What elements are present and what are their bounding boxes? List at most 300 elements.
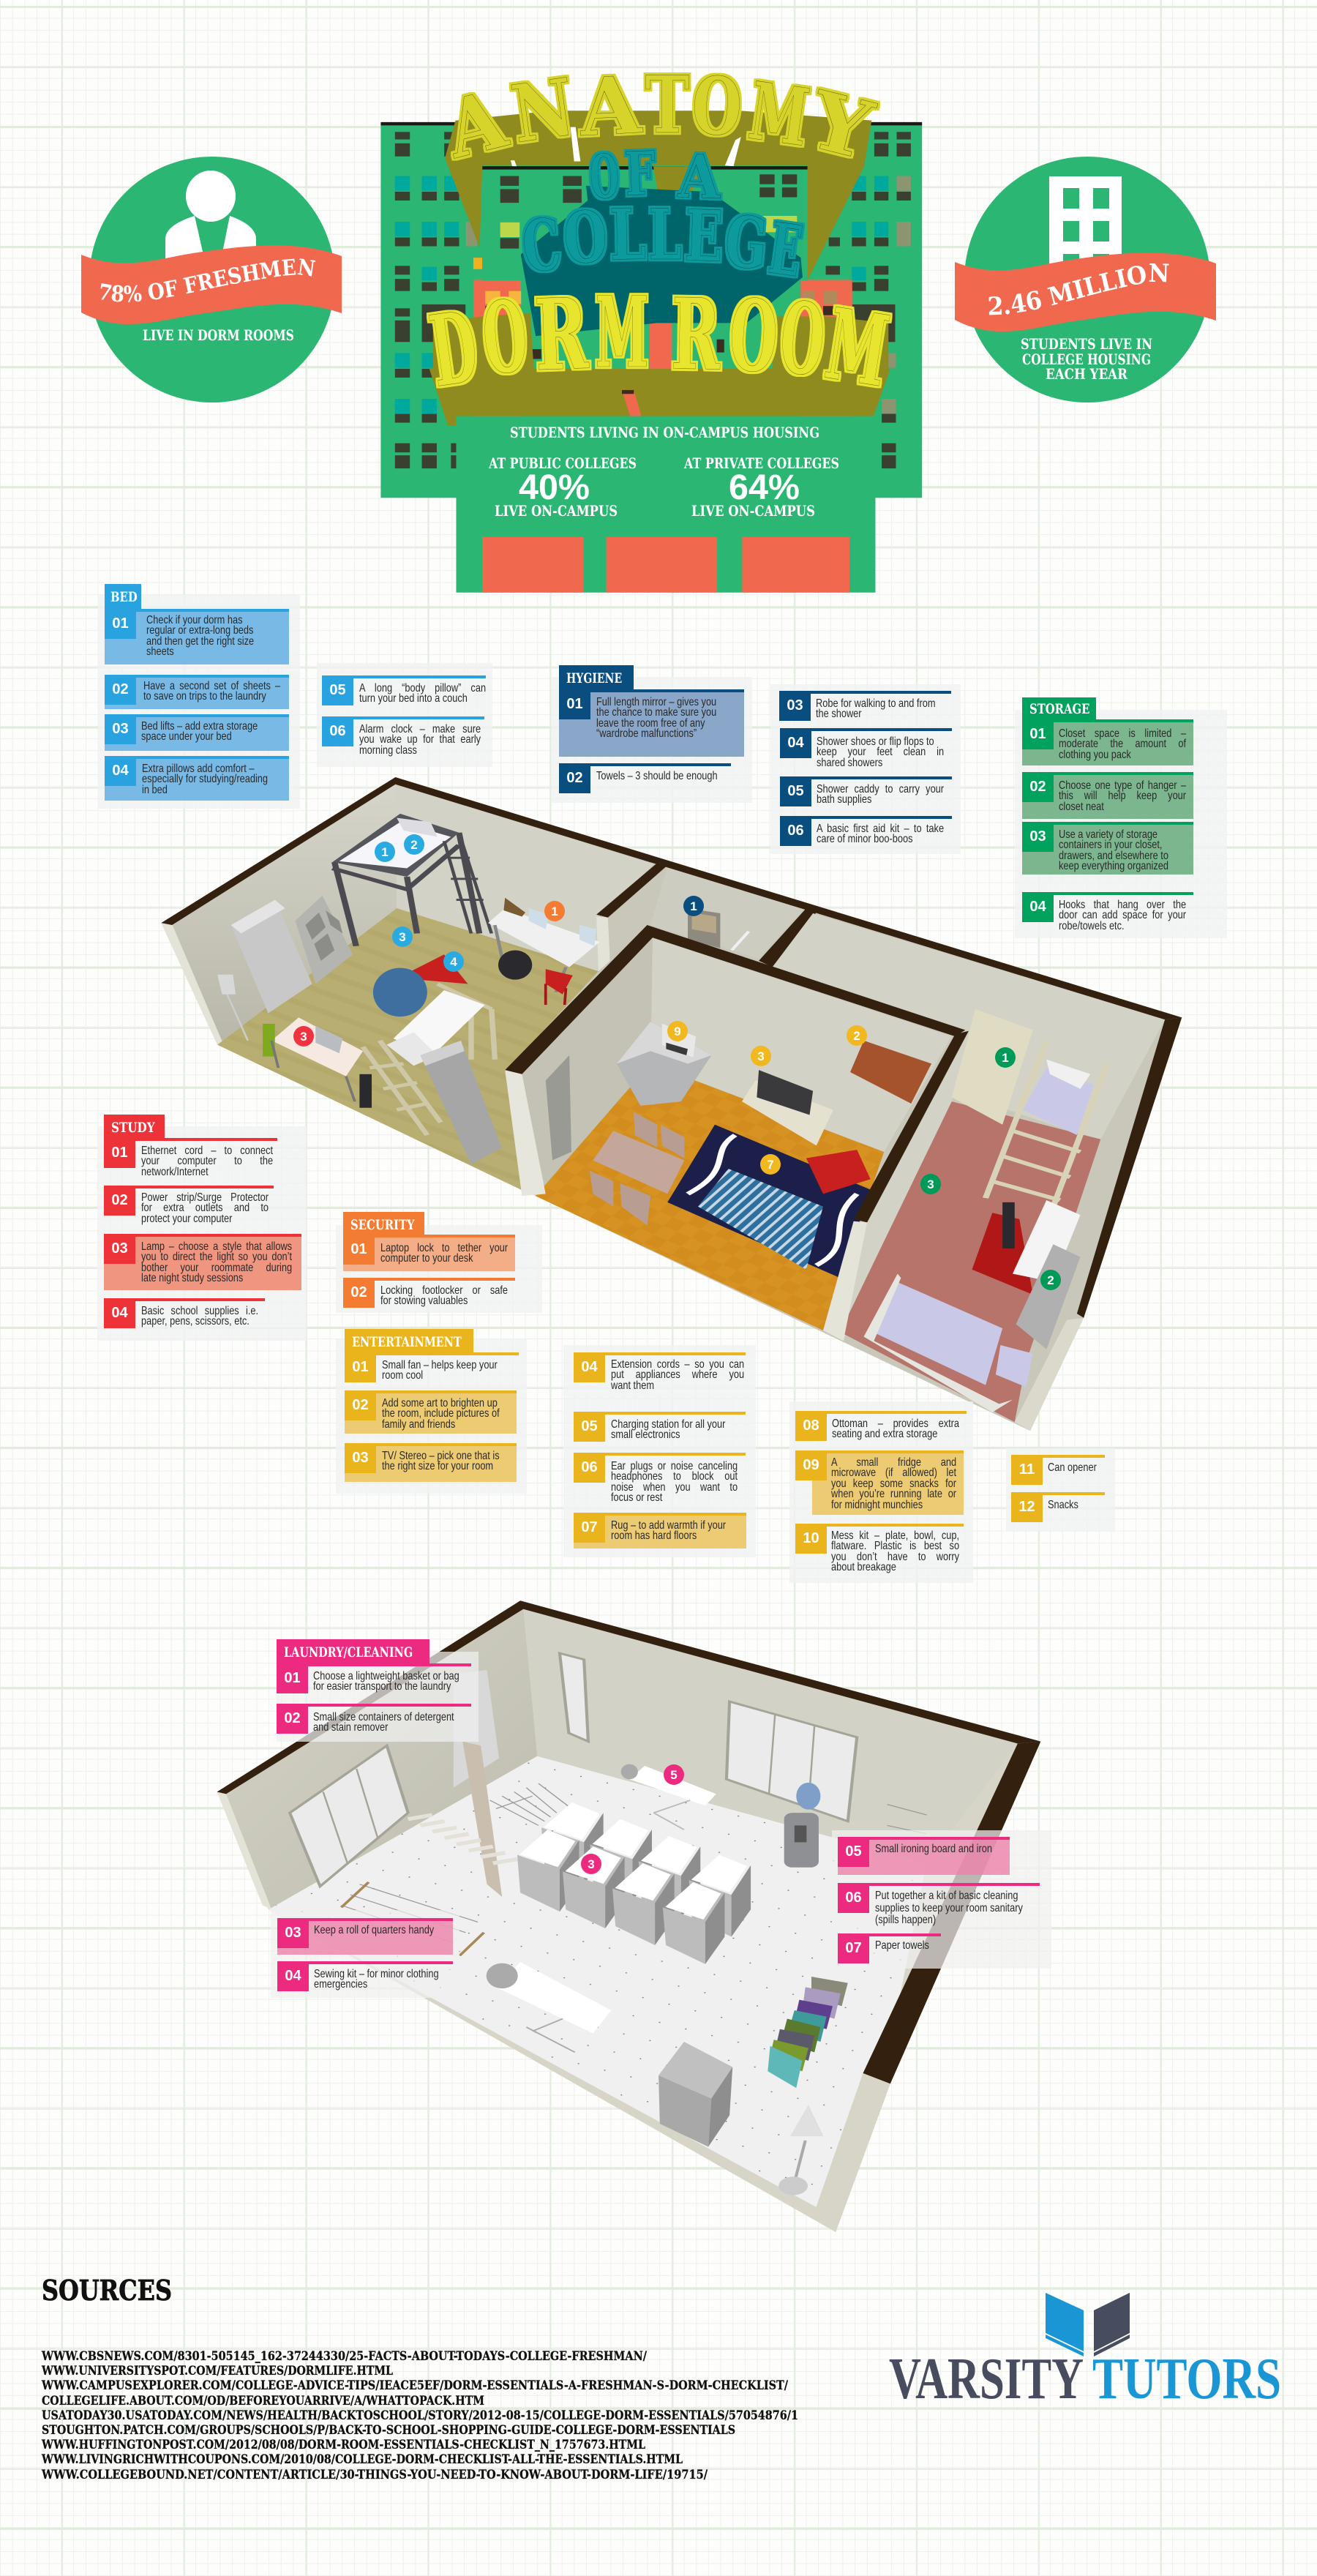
item 02 <box>104 1186 274 1226</box>
item 03: late night study sessions <box>141 1272 243 1284</box>
sources list: WWW.CBSNEWS.COM/8301-505145_162-37244330/25-FACTS-ABOUT-TODAYS-COLLEGE-FRESHMAN/ <box>41 2349 648 2364</box>
painting <box>850 1041 931 1104</box>
item 04: 04 <box>111 1305 128 1321</box>
item 10: you don’t have to worry <box>831 1551 959 1563</box>
item 02 <box>105 675 289 709</box>
item 02 <box>345 1390 517 1434</box>
item 07: Rug – to add warmth if your <box>611 1519 726 1532</box>
item 02: closet neat <box>1059 801 1104 813</box>
item 08: Ottoman – provides extra <box>832 1418 959 1430</box>
panel: hygiene <box>552 665 752 803</box>
badge: hygiene 1 <box>683 896 704 916</box>
sources and logo <box>0 2261 1317 2496</box>
building <box>380 111 922 593</box>
sources list: WWW.LIVINGRICHWITHCOUPONS.COM/2010/08/COLLEGE-DORM-CHECKLIST-ALL-THE-ESSENTIALS.HTML <box>41 2452 683 2467</box>
ribbon text: 78% OF FRESHMEN <box>101 258 316 302</box>
tv stand <box>742 1070 833 1145</box>
overhead rack <box>408 1815 517 1863</box>
icon: student <box>165 171 256 278</box>
room: bedroom two <box>773 913 1165 1431</box>
sources list: WWW.CAMPUSEXPLORER.COM/COLLEGE-ADVICE-TIPS/IEACE5EF/DORM-ESSENTIALS-A-FRESHMAN-S-DORM-CHECKLIST/ <box>41 2378 789 2393</box>
badge: entertainment 7 <box>760 1154 781 1175</box>
item 01: 01 <box>1029 726 1046 742</box>
panel: security <box>336 1212 542 1313</box>
item 05: small electronics <box>611 1429 680 1441</box>
item 01 <box>277 1663 471 1693</box>
item 03: 03 <box>1029 828 1046 845</box>
title: anatomy: N <box>506 60 580 161</box>
item 01: Small fan – helps keep your <box>382 1359 498 1371</box>
badge: entertainment 2 <box>847 1025 867 1046</box>
badge: laundry 5: 5 <box>670 1768 678 1782</box>
title: of a: O <box>588 141 621 213</box>
header illustration <box>81 58 1216 593</box>
item 04: Hooks that hang over the <box>1059 899 1186 911</box>
item 02: to save on trips to the laundry <box>143 690 266 703</box>
item 01: 01 <box>352 1359 369 1375</box>
item 04: especially for studying/reading <box>142 773 268 785</box>
item 02 <box>559 763 731 793</box>
item 04: Basic school supplies i.e. <box>141 1305 258 1317</box>
item 03: 03 <box>112 721 129 737</box>
room: living room <box>505 937 952 1330</box>
item 06 <box>574 1453 746 1504</box>
title: college: E <box>765 206 807 293</box>
badge: entertainment 9 <box>667 1021 688 1041</box>
panel: bed continued <box>317 663 492 767</box>
item 07: Paper towels <box>875 1939 929 1952</box>
item 06: Ear plugs or noise canceling <box>611 1460 738 1472</box>
item 09: 09 <box>803 1457 819 1473</box>
heading: bed <box>105 584 141 610</box>
item 05 <box>574 1412 746 1442</box>
item 01: for easier transport to the laundry <box>313 1680 451 1693</box>
item 04 <box>574 1352 746 1393</box>
tall locker <box>421 1041 502 1164</box>
panel: entertainment four <box>1006 1448 1115 1532</box>
badge: bed 2 <box>404 834 424 855</box>
room: hallway <box>650 866 804 959</box>
panel: laundry right <box>832 1830 1051 1969</box>
item 02: Have a second set of sheets – <box>143 680 280 692</box>
item 03: Bed lifts – add extra storage <box>141 720 258 733</box>
title: college: L <box>609 192 647 276</box>
title: college <box>519 192 807 293</box>
item 03: 03 <box>787 697 803 714</box>
housing stats: 64% <box>729 468 800 507</box>
heading: security <box>343 1212 424 1235</box>
item 10 <box>795 1524 964 1575</box>
heading: entertainment <box>345 1329 473 1353</box>
item 12 <box>1011 1492 1105 1522</box>
item 01: “wardrobe malfunctions” <box>596 727 697 740</box>
item 06: headphones to block out <box>611 1470 738 1483</box>
item 08: seating and extra storage <box>832 1428 937 1440</box>
item 06: noise when you want to <box>611 1481 738 1494</box>
housing stats: AT PRIVATE COLLEGES <box>683 454 839 472</box>
ribbon text: 2.46 MILLION <box>989 263 1169 315</box>
panel: bed <box>98 584 300 809</box>
item 01: regular or extra-long beds <box>146 624 253 637</box>
item 05 <box>838 1837 1010 1875</box>
item 05: turn your bed into a couch <box>359 692 468 705</box>
item 02: family and friends <box>382 1418 455 1431</box>
badge: storage 3 <box>920 1174 941 1194</box>
title: college: C <box>519 203 565 289</box>
item 03: bother your roommate during <box>141 1262 292 1274</box>
item 11: 11 <box>1019 1461 1035 1478</box>
room: bedroom one <box>161 785 654 1192</box>
title extrusion: dorm room <box>429 369 890 426</box>
item 10: about breakage <box>831 1561 896 1573</box>
item 02: 02 <box>1029 779 1046 795</box>
item 02: Towels – 3 should be enough <box>596 770 718 782</box>
item 03 <box>345 1443 517 1482</box>
sources list: STOUGHTON.PATCH.COM/GROUPS/SCHOOLS/P/BACK-TO-SCHOOL-SHOPPING-GUIDE-COLLEGE-DORM-ESSENTIALS <box>42 2423 735 2438</box>
item 04: Sewing kit – for minor clothing <box>314 1968 439 1980</box>
item 05 <box>322 675 486 705</box>
item 07 <box>574 1513 746 1549</box>
item 01: Choose a lightweight basket or bag <box>313 1670 459 1682</box>
item 01 <box>559 689 744 757</box>
item 06: 06 <box>845 1890 862 1906</box>
badge: storage 1 <box>995 1047 1016 1068</box>
item 10: 10 <box>803 1530 819 1546</box>
sources heading: SOURCES <box>42 2274 172 2307</box>
red blocks <box>473 280 521 417</box>
title: dorm room: R <box>533 276 590 393</box>
kitchen unit <box>617 1022 711 1106</box>
item 05: 05 <box>329 682 346 698</box>
title: dorm room: D <box>424 289 484 410</box>
divider walls <box>596 863 817 967</box>
item 05: bath supplies <box>817 793 871 806</box>
badge: laundry 5 <box>664 1764 684 1785</box>
item 06: care of minor boo-boos <box>817 833 912 845</box>
panel: storage <box>1015 697 1227 938</box>
item 04: shared showers <box>817 757 882 769</box>
item 05: Charging station for all your <box>611 1418 725 1431</box>
title: anatomy: A <box>436 72 516 177</box>
item 05: 05 <box>787 783 804 799</box>
badge: bed 1 <box>375 842 395 862</box>
panel: entertainment continued <box>563 1345 756 1557</box>
badge: bed 4: 4 <box>450 955 457 969</box>
title: anatomy: M <box>743 64 814 165</box>
title: anatomy: A <box>577 59 645 154</box>
item 06: 06 <box>581 1459 598 1475</box>
sources list: USATODAY30.USATODAY.COM/NEWS/HEALTH/BACKTOSCHOOL/STORY/2012-08-15/COLLEGE-DORM-ESSENTIALS/57054876/1 <box>42 2408 798 2423</box>
item 07: room has hard floors <box>611 1530 697 1542</box>
wall caps <box>217 1600 1040 2083</box>
item 01 <box>343 1235 515 1271</box>
title extrusion: anatomy <box>445 111 871 280</box>
title: college: O <box>561 195 610 280</box>
red mat and desk <box>972 1200 1080 1295</box>
stand-alone washer <box>658 2042 732 2147</box>
heading: security: SECURITY <box>350 1217 415 1233</box>
item 04: robe/towels etc. <box>1059 920 1125 932</box>
title: college: L <box>648 194 682 276</box>
item 01: Laptop lock to tether your <box>380 1242 508 1254</box>
windows <box>395 132 911 468</box>
item 02 <box>343 1278 515 1308</box>
washers <box>517 1802 751 1964</box>
title: dorm room: M <box>596 274 648 390</box>
icon: building <box>1049 176 1122 272</box>
loft bed <box>332 814 492 946</box>
title: anatomy: Y <box>800 73 882 179</box>
item 03 <box>105 714 289 751</box>
item 05: Small ironing board and iron <box>875 1843 992 1855</box>
logo: varsity tutors <box>889 2293 1281 2411</box>
item 04: 04 <box>112 763 129 779</box>
item 09: A small fridge and <box>831 1456 956 1469</box>
item 02 <box>1022 772 1193 819</box>
item 02: Power strip/Surge Protector <box>141 1191 269 1204</box>
item 11 <box>1011 1455 1105 1485</box>
item 12: 12 <box>1018 1499 1035 1515</box>
item 04: door can add space for your <box>1059 909 1186 921</box>
item 06: focus or rest <box>611 1491 662 1504</box>
badge: study 3: 3 <box>300 1030 307 1044</box>
item 10: Mess kit – plate, bowl, cup, <box>831 1530 959 1542</box>
chairs <box>498 950 573 1005</box>
item 01 <box>105 609 289 664</box>
item 08: 08 <box>803 1418 819 1434</box>
water cooler <box>784 1783 820 1868</box>
study desk <box>263 1017 372 1108</box>
beam <box>462 1742 502 1897</box>
heading: entertainment: ENTERTAINMENT <box>352 1334 462 1350</box>
item 04: Extension cords – so you can <box>611 1358 744 1371</box>
walls <box>217 1609 1018 1909</box>
item 04: 04 <box>1029 899 1046 915</box>
item 06: 06 <box>787 823 804 839</box>
badge: security 1: 1 <box>551 905 558 918</box>
item 03: keep everything organized <box>1059 860 1168 872</box>
item 01: moderate the amount of <box>1059 738 1186 750</box>
item 04: 04 <box>581 1359 598 1375</box>
title: of a <box>588 138 723 213</box>
item 01 <box>104 1138 277 1178</box>
title: college: E <box>683 194 724 278</box>
item 02: and stain remover <box>313 1721 388 1734</box>
floor plan: dorm suite <box>161 777 1182 1431</box>
floor <box>269 1756 927 2208</box>
heading: bed: BED <box>110 589 138 605</box>
desk with laptops <box>488 898 600 992</box>
badge: entertainment 2: 2 <box>853 1029 860 1043</box>
title: of a: F <box>623 138 657 209</box>
item 02: Locking footlocker or safe <box>380 1284 508 1297</box>
heading: storage: STORAGE <box>1029 701 1089 717</box>
badge: entertainment 9: 9 <box>674 1025 681 1038</box>
item 01: and then get the right size <box>146 635 254 648</box>
caption: LIVE IN DORM ROOMS <box>143 326 294 344</box>
item 06: supplies to keep your room sanitary <box>875 1901 1023 1914</box>
badge: laundry 3 <box>581 1854 601 1874</box>
closet and shelf <box>231 896 353 1014</box>
item 04: Shower shoes or flip flops to <box>817 735 934 748</box>
item 06: (spills happen) <box>875 1914 936 1926</box>
item 04: keep your feet clean in <box>817 746 944 758</box>
caption <box>1021 335 1152 383</box>
badge: hygiene 1: 1 <box>690 899 697 913</box>
housing stats: LIVE ON-CAMPUS <box>495 502 618 520</box>
housing stats: AT PUBLIC COLLEGES <box>488 454 637 472</box>
badge: entertainment 7: 7 <box>767 1158 774 1172</box>
item 09: when you’re running late or <box>831 1488 956 1500</box>
item 04 <box>780 728 952 769</box>
windows <box>290 1653 857 1887</box>
item 06: A basic first aid kit – to take <box>817 823 944 835</box>
item 02: Small size containers of detergent <box>313 1711 454 1723</box>
item 07: 07 <box>845 1940 862 1956</box>
item 04: 04 <box>787 735 804 751</box>
item 05: Shower caddy to carry your <box>817 783 944 795</box>
item 04 <box>104 1298 265 1328</box>
wardrobe <box>952 1009 1033 1125</box>
item 09 <box>795 1450 964 1515</box>
badge: entertainment 3 <box>751 1046 771 1066</box>
panel: entertainment <box>336 1329 527 1494</box>
item 02: for extra outlets and to <box>141 1202 269 1214</box>
item 01 <box>1022 719 1193 765</box>
shirts <box>768 1977 848 2088</box>
item 03 <box>1022 822 1193 875</box>
housing stats: STUDENTS LIVING IN ON-CAMPUS HOUSING <box>510 424 819 441</box>
item 01: network/Internet <box>141 1166 209 1178</box>
title: anatomy <box>436 58 882 179</box>
lower bed <box>863 1273 1033 1412</box>
item 07: 07 <box>581 1519 598 1535</box>
sources list <box>41 2349 798 2482</box>
title extrusion: college <box>586 186 721 219</box>
item 03: you to direct the light so you don’t <box>141 1251 292 1263</box>
item 01: the chance to make sure you <box>596 706 716 719</box>
ball and red cushion <box>373 954 468 1016</box>
title: dorm room <box>424 274 896 410</box>
badge: bed 1: 1 <box>381 845 389 859</box>
logo: varsity tutors: VARSITY <box>889 2347 1084 2411</box>
title: dorm room: O <box>776 280 829 399</box>
item 02: protect your computer <box>141 1213 232 1225</box>
item 06: 06 <box>329 723 346 739</box>
item 05: A long “body pillow” can <box>359 682 486 694</box>
large board <box>487 1962 611 2052</box>
sources list: WWW.HUFFINGTONPOST.COM/2012/08/08/DORM-ROOM-ESSENTIALS-CHECKLIST_N_1757673.HTML <box>41 2438 645 2452</box>
item 03: Robe for walking to and from <box>816 697 935 710</box>
item 02: for stowing valuables <box>380 1295 468 1307</box>
item 04: Extra pillows add comfort – <box>142 763 255 775</box>
item 04 <box>277 1961 453 1991</box>
caption: COLLEGE HOUSING <box>1022 351 1151 368</box>
heading: storage <box>1022 697 1096 720</box>
item 04: 04 <box>285 1968 301 1984</box>
bunk bed <box>986 1041 1108 1207</box>
doors <box>482 537 583 593</box>
item 03: Lamp – choose a style that allows <box>141 1240 292 1253</box>
ironing boards <box>621 1764 716 1830</box>
sources list: COLLEGELIFE.ABOUT.COM/OD/BEFOREYOUARRIVE/A/WHATTOPACK.HTM <box>42 2394 484 2408</box>
panel: laundry <box>277 1639 479 1742</box>
sources list: WWW.COLLEGEBOUND.NET/CONTENT/ARTICLE/30-THINGS-YOU-NEED-TO-KNOW-ABOUT-DORM-LIFE/19715/ <box>41 2468 708 2482</box>
item 01 <box>345 1352 519 1382</box>
floor lamp <box>778 2105 824 2195</box>
lower bunk <box>363 984 495 1135</box>
item 03: the right size for your room <box>382 1460 493 1472</box>
floor plan: laundry room <box>217 1600 1040 2232</box>
item 01: sheets <box>146 645 174 658</box>
item 02: Choose one type of hanger – <box>1059 779 1186 792</box>
item 05 <box>780 776 952 806</box>
circle stat: college housing <box>955 157 1216 402</box>
item 02: 02 <box>352 1397 369 1413</box>
heading: hygiene <box>559 665 634 690</box>
heading: laundry <box>277 1639 429 1664</box>
item 03 <box>779 691 951 721</box>
heading: study: STUDY <box>111 1120 155 1136</box>
item 02: 02 <box>111 1192 128 1208</box>
item 05: 05 <box>581 1418 598 1434</box>
panel: hygiene continued <box>770 684 961 854</box>
item 02: this will help keep your <box>1059 790 1186 802</box>
panel: entertainment three <box>789 1401 973 1583</box>
title: college: G <box>721 199 770 285</box>
item 05: 05 <box>845 1843 862 1860</box>
title: dorm room: M <box>819 285 896 410</box>
badge: laundry 3: 3 <box>588 1857 595 1871</box>
item 04: paper, pens, scissors, etc. <box>141 1315 249 1328</box>
item 03: drawers, and elsewhere to <box>1059 850 1168 862</box>
badge: storage 2 <box>1040 1270 1061 1290</box>
badge: storage 1: 1 <box>1002 1051 1009 1065</box>
item 12: Snacks <box>1048 1499 1078 1511</box>
item 03: Keep a roll of quarters handy <box>314 1924 434 1936</box>
ribbon <box>81 245 342 324</box>
item 01: 01 <box>111 1145 128 1161</box>
item 06: Alarm clock – make sure <box>359 723 481 735</box>
sofa <box>698 1169 823 1270</box>
item 01: room cool <box>382 1369 423 1382</box>
item 01: 01 <box>284 1670 301 1686</box>
title: dorm room: O <box>479 279 532 397</box>
drying racks <box>342 1783 927 1955</box>
item 03: Use a variety of storage <box>1059 828 1157 841</box>
circle stat: freshmen <box>81 157 342 402</box>
item 09: for midnight munchies <box>831 1499 923 1511</box>
item 04: emergencies <box>314 1978 367 1991</box>
badge: security 1 <box>544 901 565 921</box>
item 06 <box>780 816 952 846</box>
wall caps <box>161 777 1182 1318</box>
badge: bed 3: 3 <box>399 930 406 944</box>
title: anatomy: O <box>690 59 744 154</box>
badge: storage 2: 2 <box>1047 1273 1054 1287</box>
item 04 <box>105 756 289 801</box>
item 02: 02 <box>284 1710 301 1726</box>
title: of a: A <box>677 141 723 213</box>
item 04: in bed <box>142 784 168 796</box>
ribbon <box>955 252 1216 332</box>
item 04: want them <box>611 1379 654 1392</box>
caption: STUDENTS LIVE IN <box>1021 335 1152 353</box>
housing stats: LIVE ON-CAMPUS <box>691 502 815 520</box>
heading: hygiene: HYGIENE <box>566 670 622 686</box>
badge: bed 4 <box>443 951 464 972</box>
item 07 <box>838 1933 941 1963</box>
